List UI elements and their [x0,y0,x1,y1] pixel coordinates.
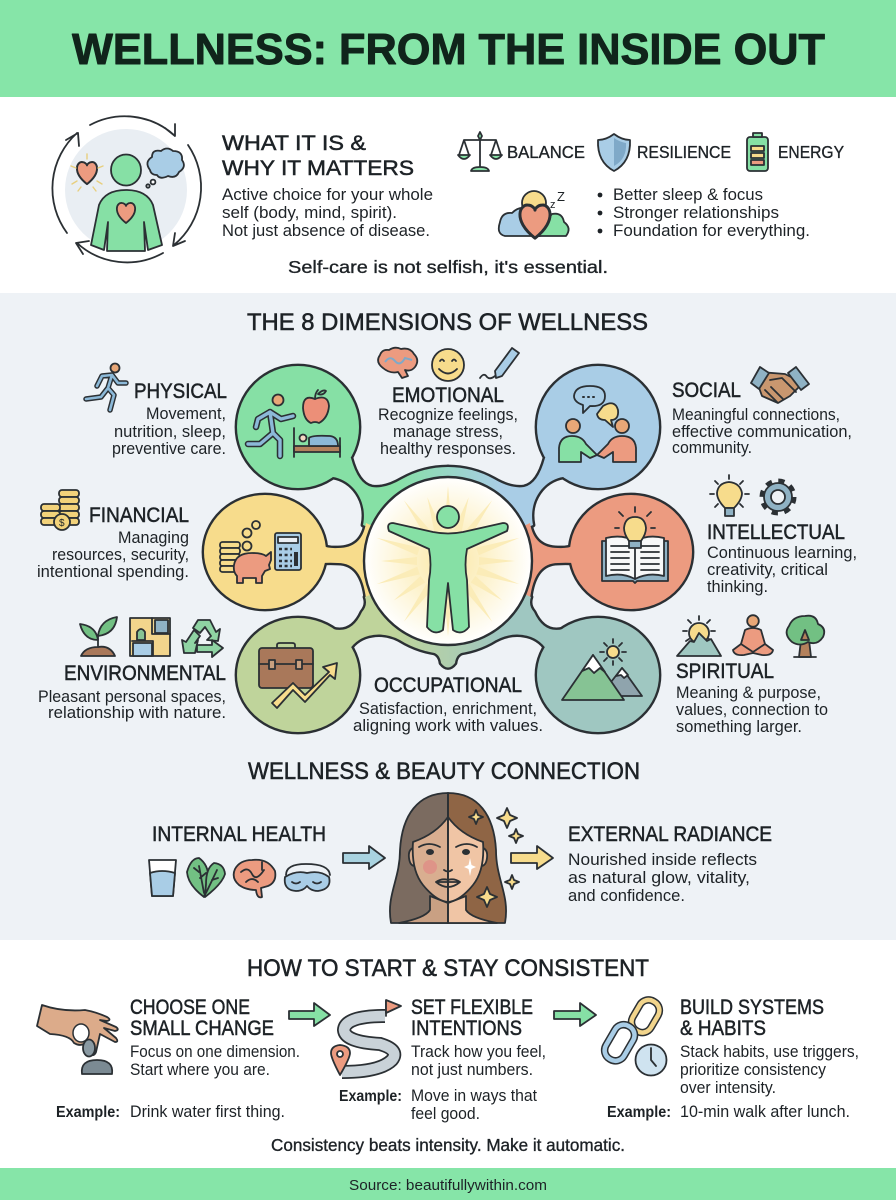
block: financial [37,490,189,581]
heading: how to start: HOW TO START & STAY CONSISTENT [247,955,649,982]
arrow: face to radiance [511,846,553,869]
block: financial: FINANCIAL [89,504,189,527]
block: external radiance: as natural glow, vitality, [568,869,750,887]
block: environmental: ENVIRONMENTAL [64,662,226,685]
block: physical: Movement, [146,405,226,423]
arrow: internal to face [343,846,385,869]
block: occupational: OCCUPATIONAL [374,674,522,697]
step 3: build systems and habits: over intensity. [680,1079,776,1097]
title banner [0,0,896,97]
icon: sleep, cloud and heart: z [550,199,556,211]
icon: balance scale [458,132,502,171]
spoke ring fills [265,427,631,675]
block: occupational [353,674,543,735]
callout: consistency: Consistency beats intensity. Make it automatic. [271,1135,625,1155]
heading: what it is [222,132,414,180]
icon: light bulb [710,475,749,516]
step 1: choose one small change: Example: [56,1104,120,1121]
icon: bookshelf [130,618,170,656]
block: social: community. [672,439,752,457]
block: financial: resources, security, [52,546,189,564]
diagram: wellness hub and spokes [204,366,692,732]
panel: what it is and why it matters [0,97,896,293]
icon: meditating figure [733,615,773,655]
icon: recycle [182,620,223,657]
step 1: choose one small change [37,996,300,1121]
block: occupational: Satisfaction, enrichment, [359,700,537,718]
icon: mountain with sun [677,616,721,656]
label: resilience: RESILIENCE [637,142,731,162]
label: balance: BALANCE [507,142,585,162]
step 1: choose one small change: Start where you are. [130,1061,270,1079]
dimension circle: spiritual [537,618,659,732]
icon: smile [432,349,464,381]
text: definition: self (body, mind, spirit). [222,204,397,222]
arrow: step 1 to 2 [289,1003,330,1026]
list: benefits: Better sleep & focus [613,186,763,204]
icon: seedling [80,617,117,656]
label: energy: ENERGY [778,142,844,162]
icon: hand placing stone [37,1005,118,1074]
block: physical [86,364,227,458]
block: spiritual: something larger. [676,718,802,736]
icon: tree [787,616,824,657]
block: intellectual: creativity, critical [707,561,828,579]
block: financial: Managing [118,529,189,547]
icon: winding road with flag and pin [331,1000,401,1075]
block: intellectual [707,475,857,596]
step 2: set flexible intentions: Example: [339,1088,402,1105]
dimension circle: occupational [237,618,359,732]
footer [0,1168,896,1200]
block: physical: PHYSICAL [134,380,227,403]
dimension circle: intellectual [570,495,692,609]
icon: gear [762,482,794,512]
block: emotional: EMOTIONAL [392,384,504,407]
icon: sleep, cloud and heart [499,189,569,238]
block: financial: intentional spending. [37,563,189,581]
panel: 8 dimensions and beauty connection [0,293,896,940]
block: external radiance [568,823,772,905]
label: internal health: INTERNAL HEALTH [152,823,326,846]
source line: Source: beautifullywithin.com [349,1177,547,1194]
step 3: build systems and habits: Stack habits, use triggers, [680,1043,859,1061]
icon: battery [747,133,768,171]
panel: how to start [0,940,896,1168]
text: definition: Active choice for your whole [222,186,433,204]
block: external radiance: EXTERNAL RADIANCE [568,823,772,846]
list: benefits: Foundation for everything. [613,222,810,240]
step 2: set flexible intentions: Move in ways that [411,1087,537,1105]
heading: what it is: WHAT IT IS & [222,132,366,155]
step 2: set flexible intentions: not just numbers. [411,1061,533,1079]
dimension circle: financial [204,495,326,609]
step 1: choose one small change: CHOOSE ONE [130,996,250,1019]
icon: face half and half [390,793,506,923]
block: emotional: Recognize feelings, [378,406,518,424]
dimension circle: social [537,366,659,488]
block: environmental [38,617,226,722]
block: spiritual: values, connection to [676,701,828,719]
icon: pen [480,348,519,378]
list: benefits: Stronger relationships [613,204,779,222]
step 1: choose one small change: Focus on one dimension. [130,1043,300,1061]
block: physical: nutrition, sleep, [114,423,226,441]
arrow: step 2 to 3 [554,1003,596,1026]
step 1: choose one small change: SMALL CHANGE [130,1017,274,1040]
block: spiritual: Meaning & purpose, [676,684,821,702]
icon: sleep, cloud and heart: Z [557,189,565,204]
step 3: build systems and habits: 10-min walk after lunch. [680,1103,850,1121]
icon: coins [41,490,79,530]
hub: central figure [364,477,532,645]
text: definition: Not just absence of disease. [222,222,430,240]
icon: shield [598,134,630,171]
heading: 8 dimensions: THE 8 DIMENSIONS OF WELLNESS [247,309,648,336]
icon: coins: $ [59,518,65,529]
icon: sleep mask [285,864,330,891]
icon: handshake [751,367,809,403]
block: occupational: aligning work with values. [353,717,543,735]
block: social: effective communication, [672,423,852,441]
block: environmental: Pleasant personal spaces, [38,688,226,706]
heading: what it is: WHY IT MATTERS [222,157,414,180]
step 3: build systems and habits: Example: [607,1104,671,1121]
icon: brain [378,348,417,378]
step 2: set flexible intentions [331,996,546,1123]
list: benefits [598,186,810,240]
block: intellectual: INTELLECTUAL [707,521,845,544]
icon: brain [234,860,275,897]
step 2: set flexible intentions: feel good. [411,1105,480,1123]
icon: spinach leaves [187,858,225,897]
block: external radiance: and confidence. [568,887,685,905]
icon: runner [86,364,126,410]
step 2: set flexible intentions: Track how you feel, [411,1043,546,1061]
heading: beauty connection: WELLNESS & BEAUTY CONNECTION [248,758,640,785]
step 3: build systems and habits: prioritize consistency [680,1061,827,1079]
block: intellectual: Continuous learning, [707,544,857,562]
block: social: Meaningful connections, [672,406,840,424]
step 3: build systems and habits: BUILD SYSTEMS [680,996,824,1019]
block: social: SOCIAL [672,379,741,402]
icon: glass of water [149,860,176,896]
text: definition [222,186,433,240]
step 1: choose one small change: Drink water first thing. [130,1103,285,1121]
step 2: set flexible intentions: SET FLEXIBLE [411,996,533,1019]
icon: sparkles [469,808,523,907]
step 3: build systems and habits [601,996,859,1121]
block: external radiance: Nourished inside reflects [568,851,757,869]
step 2: set flexible intentions: INTENTIONS [411,1017,522,1040]
title: WELLNESS: FROM THE INSIDE OUT [72,25,825,74]
icon: chain and clock [601,996,666,1076]
block: intellectual: thinking. [707,578,768,596]
block: physical: preventive care. [112,440,226,458]
block: social [672,367,852,457]
block: emotional: manage stress, [393,423,503,441]
step 3: build systems and habits: & HABITS [680,1017,766,1040]
icon: whole person with cycle arrows [52,116,201,262]
callout: self-care: Self-care is not selfish, it's essential. [288,257,608,277]
block: emotional [378,348,519,458]
block: spiritual [676,615,828,736]
block: environmental: relationship with nature. [48,704,226,722]
block: emotional: healthy responses. [380,440,516,458]
block: spiritual: SPIRITUAL [676,660,774,683]
dimension circle: physical [237,366,359,488]
